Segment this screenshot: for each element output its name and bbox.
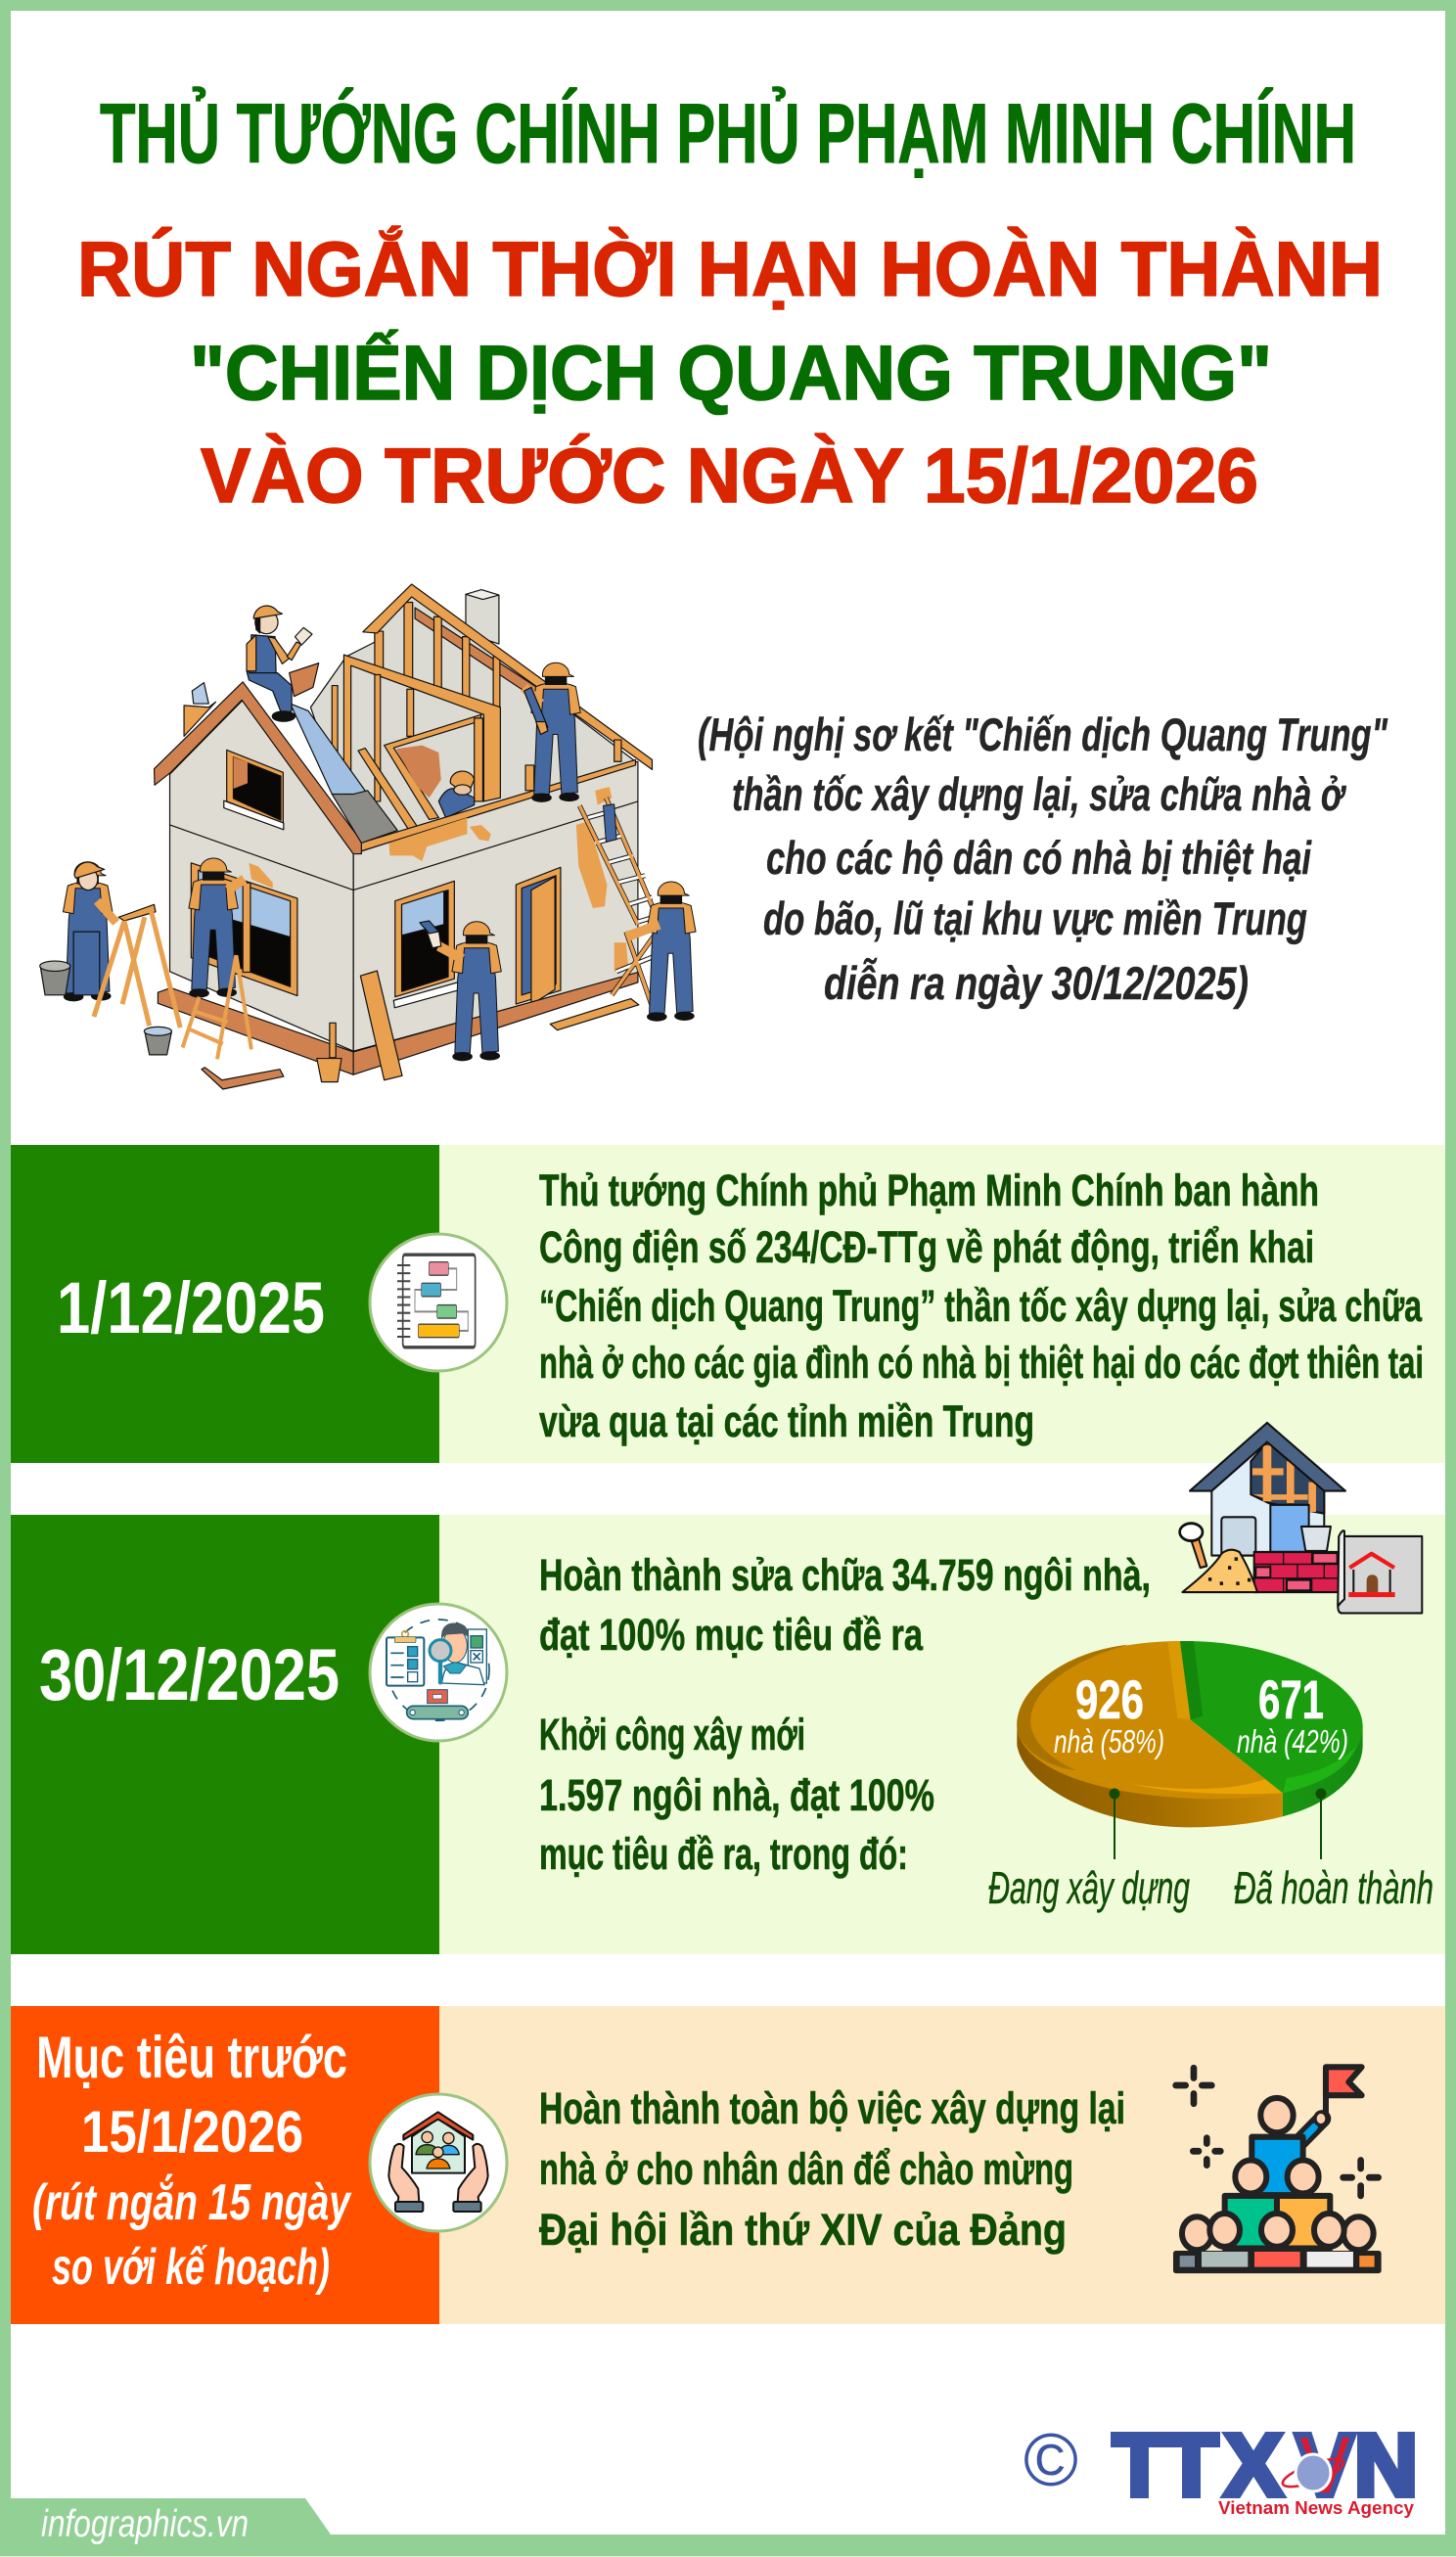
right ladder xyxy=(579,798,660,1013)
panel text: new builds xyxy=(539,1710,934,1879)
house walls xyxy=(1211,1442,1324,1556)
plank on ground xyxy=(550,999,639,1030)
globe xyxy=(1280,2453,1346,2492)
panel text: repairs: đạt 100% mục tiêu đề ra xyxy=(539,1610,924,1660)
panel: target before 15/1/2026 xyxy=(11,2006,1445,2324)
logo: TTXVN xyxy=(1113,2417,1418,2518)
date label: 30/12/2025 xyxy=(39,1634,340,1715)
pie chart: new houses xyxy=(988,1641,1433,1913)
trowel xyxy=(1180,1524,1206,1568)
right wall window xyxy=(393,881,458,1008)
target label: Mục tiêu trước xyxy=(36,2025,347,2090)
panel text: repairs xyxy=(539,1550,1151,1660)
panel: 1/12/2025 xyxy=(11,1145,1445,1463)
chimney xyxy=(466,590,499,644)
icon: notebook flowchart xyxy=(370,1234,507,1371)
subtitle note xyxy=(698,708,1388,1009)
attic window xyxy=(224,750,284,830)
icon: inspection xyxy=(370,1604,507,1741)
exposed brick patches xyxy=(388,787,628,972)
leader: completed xyxy=(1315,1789,1327,1859)
pie side wall xyxy=(1017,1725,1283,1827)
sparkles xyxy=(1176,2068,1379,2196)
panel text xyxy=(539,1165,1424,1446)
worker upper right xyxy=(524,662,580,801)
panel text: nhà ở cho nhân dân để chào mừng xyxy=(539,2144,1073,2194)
panel text: vừa qua tại các tỉnh miền Trung xyxy=(539,1396,1034,1446)
back row heads xyxy=(1182,2216,1374,2250)
panel text xyxy=(539,2083,1125,2255)
value: 926: 926 xyxy=(1075,1668,1144,1730)
exposed studs xyxy=(1251,1442,1324,1514)
roof chimney pot xyxy=(184,683,216,736)
sand pile xyxy=(1182,1550,1257,1592)
flag xyxy=(1326,2067,1362,2114)
worker on roof xyxy=(247,606,312,721)
house back wall xyxy=(310,591,638,852)
leader raising flag xyxy=(1251,2098,1327,2195)
logo tagline: Vietnam News Agency xyxy=(1218,2498,1414,2518)
middle row xyxy=(1225,2161,1330,2249)
worker on window ladder xyxy=(183,858,251,1059)
value: 926 xyxy=(1054,1668,1164,1759)
panel text: Hoàn thành toàn bộ việc xây dựng lại xyxy=(539,2083,1125,2133)
heading: shorten deadline xyxy=(77,225,1383,519)
label: under construction: Đang xây dựng xyxy=(988,1862,1190,1913)
worker with step ladder xyxy=(63,862,180,1027)
slice: under construction 58% xyxy=(1017,1641,1283,1799)
roof edge boards xyxy=(155,663,361,854)
panel text: Đại hội lần thứ XIV của Đảng xyxy=(539,2205,1067,2255)
panel text: new builds: Khởi công xây mới xyxy=(539,1710,805,1759)
tool pot and scrap wood xyxy=(202,1023,341,1089)
value: 671 xyxy=(1237,1668,1348,1759)
panel: 30/12/2025 xyxy=(11,1423,1445,1954)
panel text: new builds: 1.597 ngôi nhà, đạt 100% xyxy=(539,1770,934,1820)
worker painting right window xyxy=(420,921,501,1061)
exposed roof surface xyxy=(291,704,397,843)
left gable wall xyxy=(170,700,353,1051)
target label xyxy=(32,2025,352,2296)
heading: shorten deadline: VÀO TRƯỚC NGÀY 15/1/2026 xyxy=(201,432,1258,519)
buckets xyxy=(40,961,171,1055)
roof xyxy=(1190,1423,1345,1491)
value: 671: 671 xyxy=(1258,1668,1324,1730)
panel text: new builds: mục tiêu đề ra, trong đó: xyxy=(539,1829,908,1879)
top wall beam xyxy=(360,759,635,851)
value: 671: nhà (42%) xyxy=(1237,1723,1348,1759)
copyright mark: © xyxy=(1024,2419,1078,2502)
icon: house under repair xyxy=(1180,1423,1422,1613)
heading: shorten deadline: RÚT NGẮN THỜI HẠN HOÀN THÀNH xyxy=(77,225,1383,312)
blueprint xyxy=(1338,1530,1422,1613)
door and window xyxy=(1221,1505,1309,1556)
bricks xyxy=(1254,1552,1339,1592)
foundation xyxy=(158,973,638,1074)
slice: completed 42% xyxy=(1180,1641,1363,1793)
right wall xyxy=(353,761,638,1051)
door xyxy=(516,867,561,1005)
logo wordmark: TTXVN xyxy=(1113,2417,1418,2515)
subtitle note: diễn ra ngày 30/12/2025) xyxy=(824,957,1249,1009)
illustration: workers repairing a house xyxy=(40,584,696,1089)
icon: hands protecting family home xyxy=(370,2094,507,2231)
damaged patch xyxy=(396,746,441,798)
front row bodies xyxy=(1176,2252,1379,2270)
inner worker xyxy=(438,771,475,818)
target label: (rút ngắn 15 ngày xyxy=(32,2173,352,2231)
heading: shorten deadline: "CHIẾN DỊCH QUANG TRUNG" xyxy=(190,329,1272,416)
worker at right ladder xyxy=(628,882,696,1021)
roof timber frame xyxy=(332,584,652,819)
icon: crowd with flag xyxy=(1176,2067,1379,2270)
target label: 15/1/2026 xyxy=(81,2099,303,2165)
target label: so với kế hoạch) xyxy=(52,2239,330,2296)
panel text: repairs: Hoàn thành sửa chữa 34.759 ngôi nhà, xyxy=(539,1550,1151,1600)
paint bucket xyxy=(1301,1527,1331,1551)
value: 926: nhà (58%) xyxy=(1054,1723,1164,1759)
footer tab text: infographics.vn xyxy=(41,2503,249,2545)
leader: under construction xyxy=(1110,1789,1119,1859)
front row heads xyxy=(1209,2214,1344,2247)
title xyxy=(77,87,1383,519)
date label: 1/12/2025 xyxy=(57,1267,325,1348)
plank leaning on wall xyxy=(360,971,402,1080)
lower left window xyxy=(191,863,297,996)
